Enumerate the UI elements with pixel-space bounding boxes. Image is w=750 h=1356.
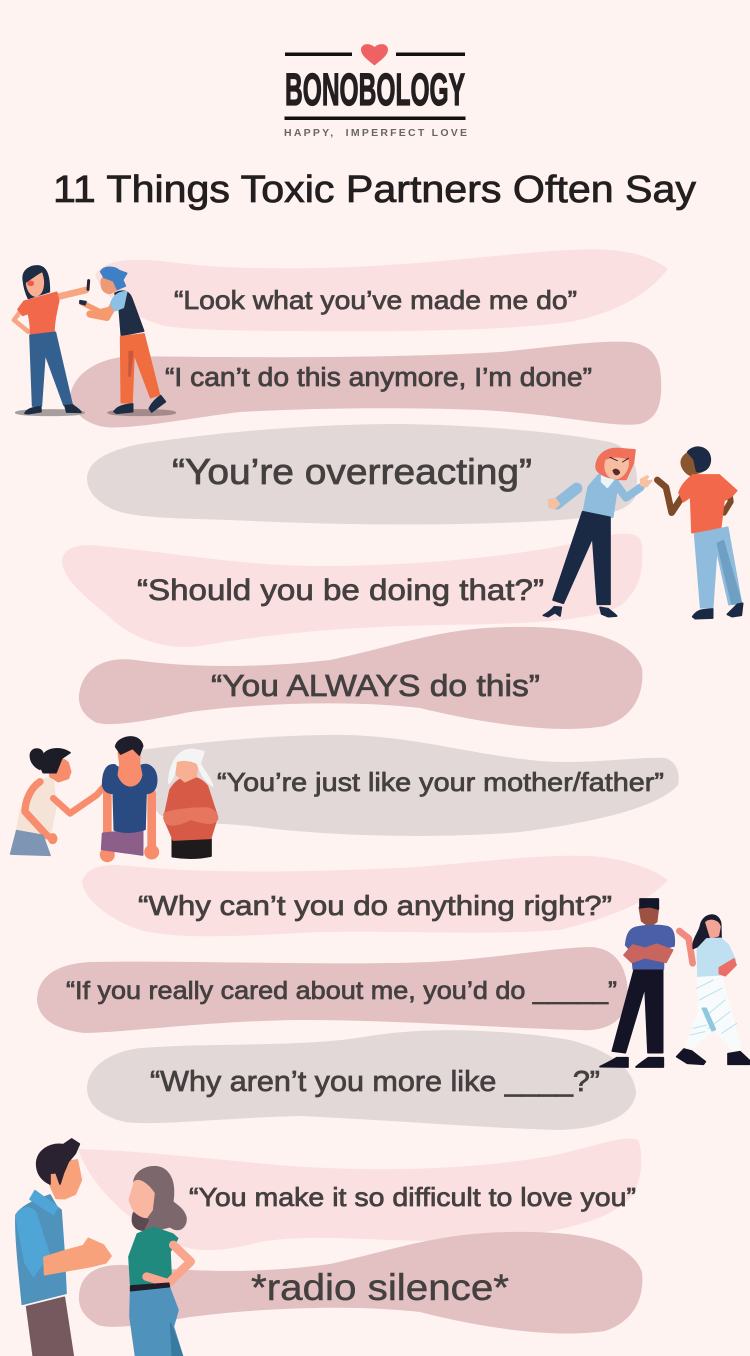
quote text: “Why aren’t you more like ____?” bbox=[150, 1066, 600, 1098]
quote text: “Why can’t you do anything right?” bbox=[138, 890, 612, 921]
panel: quote 10 bbox=[78, 1139, 641, 1250]
title: 11 Things Toxic Partners Often Say bbox=[53, 169, 696, 211]
illustration: talking couple, bottom left bbox=[16, 1139, 191, 1356]
quote text: “If you really cared about me, you’d do _____” bbox=[66, 977, 617, 1005]
quote text: “You’re just like your mother/father” bbox=[217, 767, 664, 797]
quote text: “You make it so difficult to love you” bbox=[189, 1182, 636, 1212]
quote text: “Should you be doing that?” bbox=[137, 574, 544, 607]
illustration: three people, left bbox=[11, 737, 218, 861]
logo bbox=[284, 44, 467, 139]
quote text: “I can’t do this anymore, I’m done” bbox=[165, 364, 592, 392]
quote text: “You’re overreacting” bbox=[172, 451, 532, 492]
icon: heart bbox=[361, 44, 388, 66]
panel: quote 3 bbox=[87, 424, 637, 524]
logo wordmark: BONOBOLOGY bbox=[285, 64, 465, 115]
panel: quote 4 bbox=[62, 534, 642, 647]
quote text: “You ALWAYS do this” bbox=[211, 668, 540, 703]
logo tagline: HAPPY, IMPERFECT LOVE bbox=[284, 127, 467, 139]
illustration: couple, right bbox=[600, 899, 749, 1067]
panel: quote 11 bbox=[79, 1232, 642, 1334]
panel: quote 7 bbox=[82, 856, 668, 936]
illustration: arguing couple, top left bbox=[14, 266, 175, 415]
panel: quote 8 bbox=[37, 947, 628, 1033]
panel: quote 6 bbox=[138, 735, 679, 836]
panel: quote 1 bbox=[95, 249, 668, 331]
panel: quote 5 bbox=[79, 627, 642, 729]
illustration: pointing couple, right bbox=[543, 447, 743, 619]
quote text: *radio silence* bbox=[251, 1267, 509, 1308]
quote text: “Look what you’ve made me do” bbox=[174, 285, 577, 315]
panel: quote 2 bbox=[70, 342, 661, 427]
panel: quote 9 bbox=[87, 1030, 636, 1130]
